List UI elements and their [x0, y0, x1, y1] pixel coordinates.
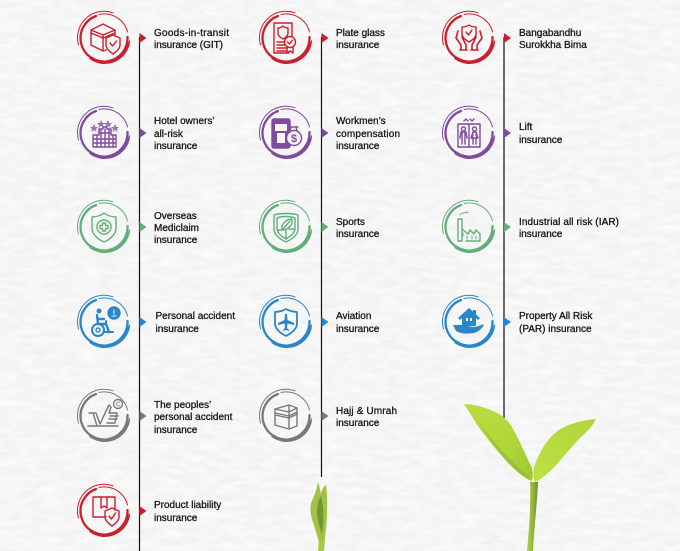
- label: Industrial all risk: insurance: [519, 229, 563, 240]
- label: Property All Risk: (PAR) insurance: [519, 324, 592, 335]
- label: Overseas Mediclaim: Overseas: [154, 211, 197, 222]
- item: Hajj & Umrah insurance: [259, 389, 328, 440]
- label: Goods-in-transit: insurance (GIT): [154, 40, 223, 51]
- label: Bangabandhu Surokkha Bima: Surokkha Bima: [519, 40, 587, 51]
- label: Sports: Sports: [336, 217, 365, 228]
- label: Goods-in-transit: Goods-in-transit: [154, 28, 229, 39]
- label: Bangabandhu Surokkha Bima: [519, 28, 587, 51]
- label: Hotel owners: [154, 116, 215, 152]
- label: Product liability: insurance: [154, 513, 198, 524]
- label: Hajj & Umrah: insurance: [336, 418, 380, 429]
- label: Lift: [519, 122, 563, 146]
- item: Overseas Mediclaim insurance: [77, 200, 146, 251]
- label: Sports: insurance: [336, 229, 380, 240]
- label: The peoples': personal accident: [154, 412, 233, 423]
- item: Goods-in-transit insurance: [77, 11, 146, 62]
- label: Bangabandhu Surokkha Bima: Bangabandhu: [519, 28, 581, 39]
- item: Sports insurance: [259, 200, 328, 251]
- timeline: column 3: [503, 37, 505, 420]
- item: Workmen's compensation insurance: [259, 106, 328, 157]
- label: Property All Risk: [519, 311, 593, 335]
- item: Hotel owners all-risk insurance: [77, 106, 146, 157]
- label: Plate glass: insurance: [336, 40, 380, 51]
- label: Hotel owners: all-risk: [154, 129, 184, 140]
- label: Plate glass: Plate glass: [336, 28, 385, 39]
- item: Bangabandhu Surokkha Bima: [442, 11, 511, 62]
- item: The peoples' personal accident insurance: [77, 389, 146, 440]
- label: Lift: insurance: [519, 135, 563, 146]
- label: Workmen's compensation: insurance: [336, 141, 380, 152]
- label: Overseas Mediclaim: [154, 211, 199, 246]
- label: Industrial all risk: Industrial all risk (IAR): [519, 217, 619, 228]
- label: Plate glass: [336, 28, 385, 51]
- label: Sports: [336, 217, 380, 240]
- label: Overseas Mediclaim: insurance: [154, 235, 198, 246]
- label: Hajj & Umrah: [336, 406, 397, 429]
- item: Workmen's compensation insurance: $: [291, 133, 297, 145]
- label: Product liability: [154, 500, 221, 524]
- label: Aviation: insurance: [336, 324, 380, 335]
- item: Industrial all risk insurance: [442, 200, 511, 251]
- large plant seedling: [464, 404, 596, 551]
- label: The peoples': The peoples’: [154, 400, 211, 411]
- small plant bud: [310, 482, 327, 551]
- item: Property All Risk insurance: [442, 295, 511, 346]
- label: Workmen's compensation: Workmen’s: [336, 116, 386, 127]
- label: Hajj & Umrah: Hajj & Umrah: [336, 406, 397, 417]
- label: Aviation: Aviation: [336, 311, 371, 322]
- label: Workmen's compensation: compensation: [336, 129, 400, 140]
- label: Goods-in-transit: [154, 28, 229, 51]
- label: The peoples': [154, 400, 233, 436]
- label: Hotel owners: insurance: [154, 141, 198, 152]
- label: Personal accident: insurance: [156, 324, 199, 335]
- label: Product liability: Product liability: [154, 500, 221, 511]
- label: Lift: Lift: [519, 122, 533, 133]
- timeline: column 1: [138, 37, 140, 551]
- item: Product liability insurance: [77, 484, 146, 535]
- item: Aviation insurance: [259, 295, 328, 346]
- label: Hotel owners: Hotel owners’: [154, 116, 215, 127]
- label: Personal accident: Personal accident: [156, 311, 235, 322]
- label: Property All Risk: Property All Risk: [519, 311, 593, 322]
- label: Overseas Mediclaim: Mediclaim: [154, 223, 199, 234]
- label: Industrial all risk: [519, 217, 619, 240]
- label: Aviation: [336, 311, 380, 335]
- item: Personal accident insurance: [77, 295, 146, 346]
- timeline: column 2: [320, 37, 322, 477]
- item: Lift insurance: [442, 106, 511, 157]
- item: Plate glass insurance: [259, 11, 328, 62]
- label: Workmen's compensation: [336, 116, 400, 152]
- label: The peoples': insurance: [154, 425, 198, 436]
- label: Personal accident: [156, 311, 235, 335]
